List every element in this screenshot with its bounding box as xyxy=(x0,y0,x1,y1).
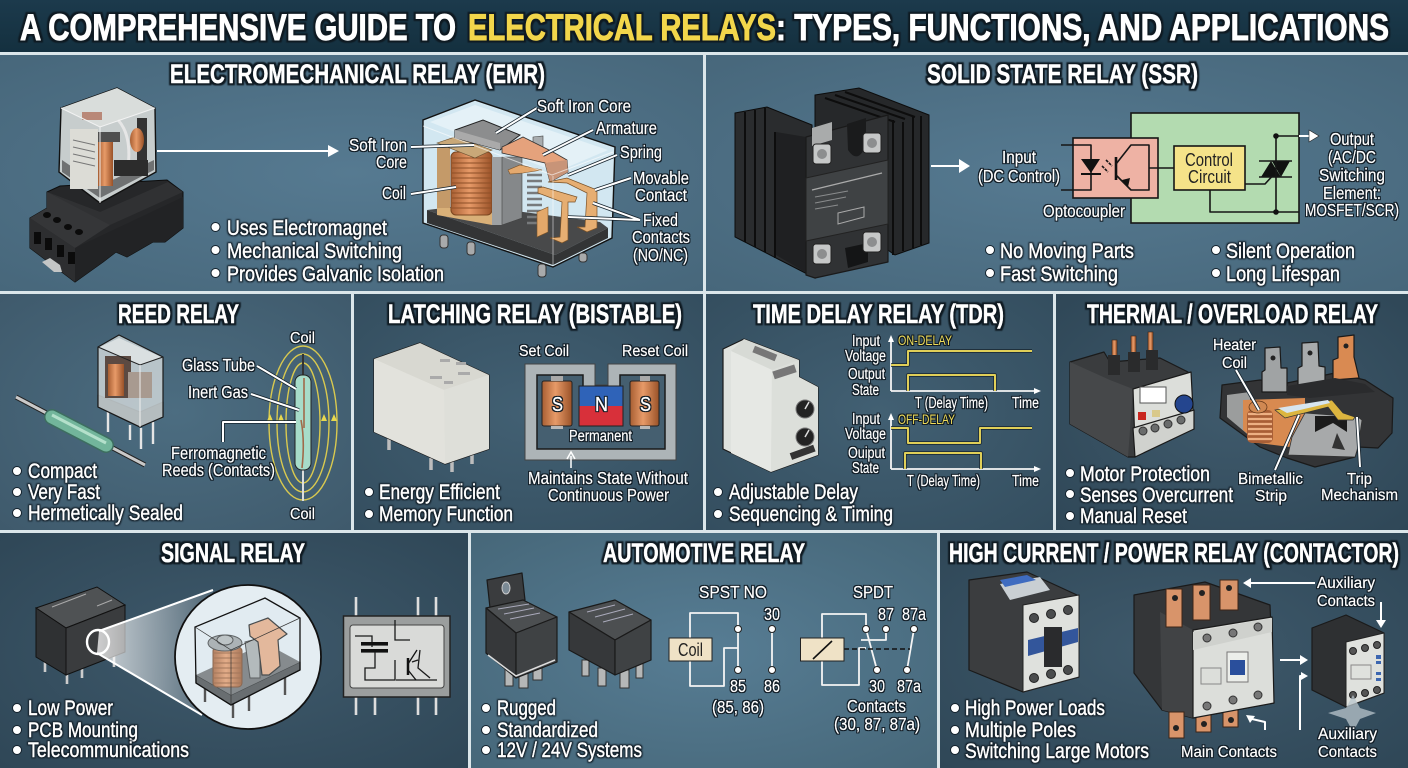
labels: EMR parts: Coil xyxy=(382,183,406,203)
labels: SSR schematic: Optocoupler xyxy=(1043,201,1125,221)
bullets: contactor: High Power Loads xyxy=(965,697,1105,720)
bullets: signal: Telecommunications xyxy=(28,739,189,762)
bullets: thermal: Senses Overcurrent xyxy=(1080,484,1233,507)
magnified cutaway circle xyxy=(175,585,321,729)
timing chart: off-delay: T (Delay Time) xyxy=(907,473,980,490)
labels: latching: Set Coil xyxy=(519,343,569,360)
bullets: SSR: No Moving Parts xyxy=(1000,240,1134,263)
heading: signal: SIGNAL RELAY xyxy=(161,538,305,568)
bullets: reed: Very Fast xyxy=(28,481,100,504)
SPST NO diagram: SPST NO xyxy=(699,582,767,602)
labels: EMR parts: Spring xyxy=(620,142,662,162)
labels: contactor: Contacts xyxy=(1317,593,1375,610)
signal relay schematic xyxy=(344,597,450,715)
panel: reed relay xyxy=(0,294,351,530)
heading: latching: LATCHING RELAY (BISTABLE) xyxy=(388,299,682,329)
relay photo with socket xyxy=(30,88,183,282)
labels: overload cutaway: Heater xyxy=(1213,337,1256,354)
leader lines: EMR xyxy=(411,108,640,220)
bullets: SSR: Long Lifespan xyxy=(1226,263,1340,286)
panel: electromechanical relay xyxy=(0,55,703,291)
labels: EMR parts: Movable xyxy=(633,168,689,188)
bullets: SSR: Fast Switching xyxy=(1000,263,1118,286)
labels: SSR schematic: (AC/DC xyxy=(1328,147,1376,167)
overload relay cutaway xyxy=(1220,335,1393,470)
timing chart: off-delay: Input xyxy=(852,411,881,428)
bullets: thermal: Motor Protection xyxy=(1080,463,1210,486)
bullets: EMR: Provides Galvanic Isolation xyxy=(227,263,444,286)
bullets: EMR xyxy=(211,217,444,286)
labels: reed diagram: Reeds (Contacts) xyxy=(162,460,275,480)
timing chart: off-delay: OFF-DELAY xyxy=(898,411,955,427)
bullets: latching xyxy=(364,481,513,526)
SPST NO diagram: Coil xyxy=(678,640,703,660)
SPST NO diagram: (85, 86) xyxy=(712,697,764,717)
labels: latching xyxy=(519,343,688,505)
reed diagram with field lines xyxy=(223,346,337,501)
heading: automotive: AUTOMOTIVE RELAY xyxy=(603,538,805,568)
SPDT diagram: SPDT xyxy=(853,582,893,602)
bullets: contactor: Switching Large Motors xyxy=(965,740,1149,763)
latching magnetic circuit: N xyxy=(595,394,608,416)
title banner xyxy=(0,0,1408,52)
bullets: TDR: Sequencing & Timing xyxy=(729,503,893,526)
labels: overload cutaway: Bimetallic xyxy=(1238,471,1303,488)
SPST NO diagram: 85 xyxy=(730,676,746,696)
labels: latching: Maintains State Without xyxy=(528,468,688,488)
labels: SSR schematic: Element: xyxy=(1323,183,1381,203)
labels: contactor xyxy=(1181,575,1377,761)
labels: overload cutaway: Trip xyxy=(1347,471,1372,488)
bullets: automotive: Standardized xyxy=(497,719,598,742)
title: white part: A COMPREHENSIVE GUIDE TO xyxy=(20,7,456,48)
labels: EMR parts: Contacts xyxy=(632,227,690,247)
SPDT diagram: 87a xyxy=(902,604,926,624)
panel: thermal overload relay xyxy=(1056,294,1408,530)
bullets: reed: Hermetically Sealed xyxy=(28,502,183,525)
labels: EMR parts: Soft Iron xyxy=(349,135,407,155)
latching magnetic circuit xyxy=(525,364,676,468)
labels: latching: Continuous Power xyxy=(548,485,669,505)
labels: contactor: Auxiliary xyxy=(1318,726,1377,743)
timing chart: off-delay xyxy=(845,411,1041,490)
timing chart: on-delay: State xyxy=(852,382,879,399)
title: highlighted part: ELECTRICAL RELAYS xyxy=(468,7,776,48)
bullets: automotive: Rugged xyxy=(497,697,556,720)
SSR schematic: Control xyxy=(1185,150,1233,170)
labels: contactor: Auxiliary xyxy=(1317,575,1375,592)
bullets: EMR: Mechanical Switching xyxy=(227,240,402,263)
arrow: SSR to schematic xyxy=(931,159,970,173)
magnifier lines xyxy=(97,590,213,715)
bullets: signal xyxy=(12,697,189,762)
labels: SSR schematic: Output xyxy=(1330,129,1374,149)
timing chart: off-delay: Ouiput xyxy=(848,445,886,462)
labels: SSR schematic: (DC Control) xyxy=(978,166,1060,186)
bullets: latching: Memory Function xyxy=(379,503,513,526)
timing chart: off-delay: Time xyxy=(1012,473,1039,490)
SPST NO diagram: 30 xyxy=(764,604,780,624)
timing chart: on-delay: Voltage xyxy=(845,348,886,365)
bullets: latching: Energy Efficient xyxy=(379,481,500,504)
large contactor with copper terminals xyxy=(1134,580,1274,738)
panel: high current contactor xyxy=(940,533,1408,768)
contactor photo xyxy=(969,572,1079,692)
bullets: contactor xyxy=(950,697,1149,763)
labels: reed diagram: Coil xyxy=(290,330,315,347)
auxiliary contact block xyxy=(1312,615,1384,707)
magnifier cone xyxy=(97,590,213,715)
latching magnetic circuit: S xyxy=(552,394,563,416)
labels: reed diagram: Glass Tube xyxy=(182,355,255,375)
latching magnetic circuit: S xyxy=(640,394,651,416)
timing chart: on-delay: T (Delay Time) xyxy=(915,395,988,412)
labels: reed diagram xyxy=(162,330,315,523)
watermark sparkle xyxy=(1328,695,1376,732)
heading: EMR: ELECTROMECHANICAL RELAY (EMR) xyxy=(170,59,545,89)
bullets: EMR: Uses Electromagnet xyxy=(227,217,387,240)
timing chart: on-delay: ON-DELAY xyxy=(898,332,952,348)
timing chart: on-delay: Input xyxy=(852,333,881,350)
timing chart: on-delay: Time xyxy=(1012,395,1039,412)
labels: overload cutaway xyxy=(1213,337,1398,505)
heading: SSR: SOLID STATE RELAY (SSR) xyxy=(927,59,1198,89)
labels: SSR schematic xyxy=(978,129,1399,221)
timing chart: on-delay: Output xyxy=(848,366,886,383)
SPDT diagram: 87a xyxy=(897,676,921,696)
signal relay photo xyxy=(36,587,125,684)
timing chart: on-delay xyxy=(845,332,1041,412)
bullets: SSR xyxy=(986,240,1355,286)
labels: reed diagram: Coil xyxy=(290,506,315,523)
bullets: contactor: Multiple Poles xyxy=(965,719,1076,742)
heading: reed: REED RELAY xyxy=(118,299,239,329)
bullets: TDR xyxy=(714,481,893,526)
bullets: automotive: 12V / 24V Systems xyxy=(497,739,642,762)
labels: overload cutaway: Mechanism xyxy=(1321,487,1398,504)
bullets: automotive xyxy=(482,697,642,762)
labels: reed diagram: Inert Gas xyxy=(188,382,248,402)
labels: reed diagram: Ferromagnetic xyxy=(171,443,266,463)
latching relay photo xyxy=(374,343,489,472)
SSR schematic xyxy=(1061,113,1319,223)
labels: overload cutaway: Strip xyxy=(1255,488,1287,505)
SPST NO diagram: 86 xyxy=(764,676,780,696)
labels: EMR parts: Contact xyxy=(635,185,687,205)
panel: solid state relay xyxy=(706,55,1408,291)
labels: SSR schematic: Switching xyxy=(1319,165,1385,185)
SPDT diagram: Contacts xyxy=(847,696,906,716)
labels: EMR parts: (NO/NC) xyxy=(633,245,688,265)
SPDT diagram: 30 xyxy=(869,676,885,696)
DIN-rail timer photo xyxy=(723,339,818,472)
SPDT diagram: (30, 87, 87a) xyxy=(834,714,920,734)
bullets: signal: Low Power xyxy=(28,697,113,720)
labels: EMR parts: Armature xyxy=(596,118,657,138)
timing chart: off-delay: Voltage xyxy=(845,426,886,443)
labels: EMR parts: Soft Iron Core xyxy=(537,96,631,116)
panel: signal relay xyxy=(0,533,468,768)
small magnifier ring xyxy=(87,630,109,654)
SSR photo with heat sink xyxy=(735,88,929,278)
bullets: reed xyxy=(12,460,183,525)
bullets: SSR: Silent Operation xyxy=(1226,240,1355,263)
labels: EMR parts: Fixed xyxy=(643,210,678,230)
reed switch xyxy=(16,397,145,465)
arrow: relay to cutaway xyxy=(157,145,339,157)
labels: contactor: Contacts xyxy=(1318,744,1377,761)
arrows: contactor callouts xyxy=(1243,578,1386,730)
heading: TDR: TIME DELAY RELAY (TDR) xyxy=(753,299,1004,329)
automotive relay without tab xyxy=(569,600,651,688)
overload relay photo xyxy=(1070,332,1194,457)
automotive relay with tab xyxy=(486,573,557,688)
panel: automotive relay xyxy=(471,533,937,768)
SPDT diagram: 87 xyxy=(878,604,894,624)
labels: latching: Reset Coil xyxy=(622,343,688,360)
labels: EMR parts xyxy=(349,96,690,265)
bullets: reed: Compact xyxy=(28,460,97,483)
bullets: thermal: Manual Reset xyxy=(1080,505,1187,528)
SPST NO diagram xyxy=(669,582,780,717)
labels: EMR parts: Core xyxy=(376,152,407,172)
timing chart: off-delay: State xyxy=(852,460,879,477)
bullets: signal: PCB Mounting xyxy=(28,719,138,742)
SSR schematic: Circuit xyxy=(1188,167,1231,187)
panel: latching relay xyxy=(354,294,703,530)
SPDT diagram xyxy=(800,582,926,734)
labels: SSR schematic: Input xyxy=(1002,147,1036,167)
cutaway relay diagram xyxy=(423,100,615,277)
glass relay photo xyxy=(98,335,163,449)
labels: latching: Permanent xyxy=(569,428,633,445)
bullets: TDR: Adjustable Delay xyxy=(729,481,858,504)
panel: time delay relay xyxy=(706,294,1053,530)
bullets: thermal xyxy=(1066,463,1233,528)
labels: contactor: Main Contacts xyxy=(1181,744,1277,761)
labels: overload cutaway: Coil xyxy=(1222,355,1247,372)
